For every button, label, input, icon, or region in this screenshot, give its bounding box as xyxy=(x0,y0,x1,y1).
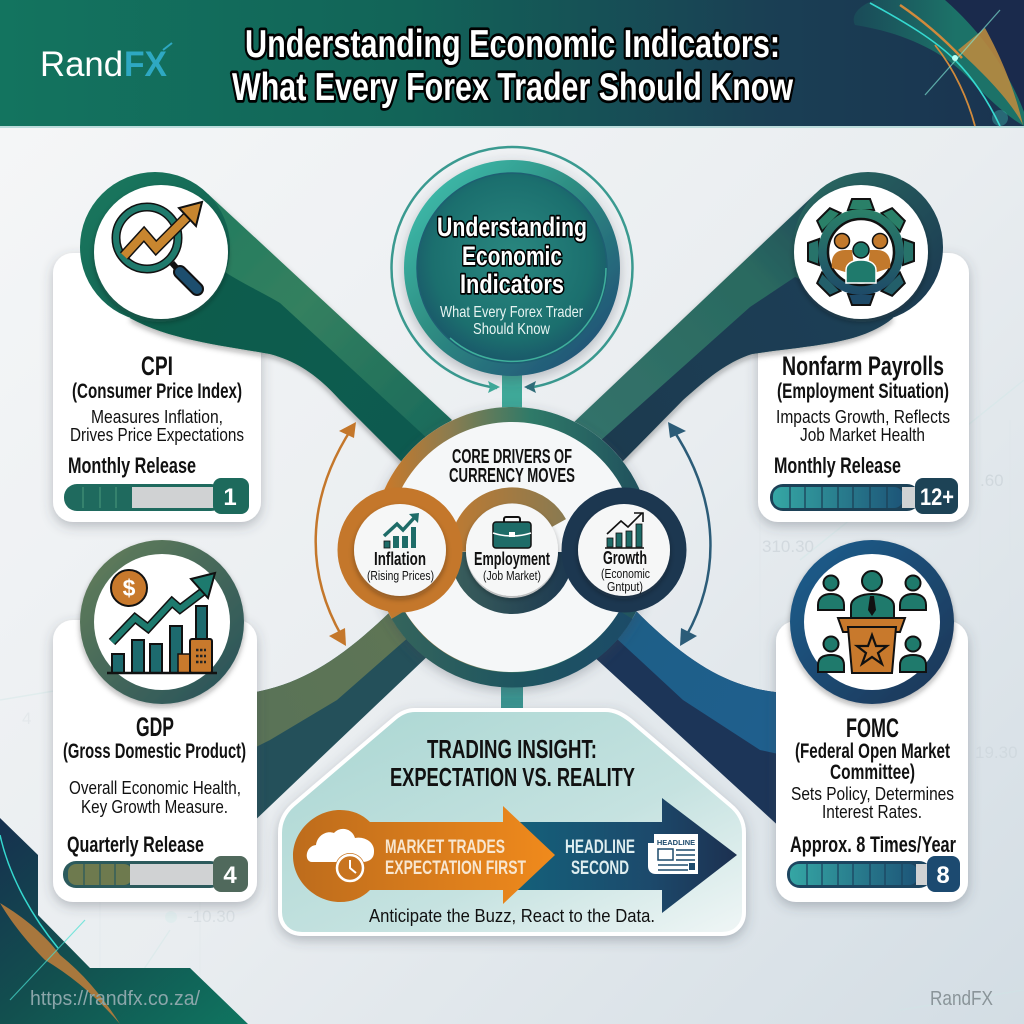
card: FOMC panel xyxy=(776,621,968,902)
connector top xyxy=(502,372,522,417)
FOMC icon disc xyxy=(790,540,954,704)
driver: Inflation: (Rising Prices) xyxy=(367,568,434,583)
footer brand: RandFX xyxy=(930,988,993,1010)
circle subheading: Should Know xyxy=(473,321,550,338)
band: GDP to centre xyxy=(250,612,432,825)
header banner xyxy=(0,0,1024,128)
icon: growth chart with coin xyxy=(107,570,217,673)
logo: FX xyxy=(124,45,168,84)
CPI card text: Drives Price Expectations xyxy=(70,425,244,445)
CPI card text: Measures Inflation, xyxy=(91,407,223,427)
CPI icon disc xyxy=(80,172,230,322)
driver: Inflation xyxy=(346,496,454,604)
Nonfarm card text: Impacts Growth, Reflects xyxy=(776,407,950,427)
insight heading: TRADING INSIGHT: xyxy=(427,734,597,764)
circle subheading: What Every Forex Trader xyxy=(440,304,584,321)
driver: Employment xyxy=(458,495,566,606)
card: GDP panel xyxy=(53,620,257,902)
CPI card text: CPI xyxy=(141,351,173,381)
GDP card text: Quarterly Release xyxy=(67,832,204,857)
title: What Every Forex Trader Should Know xyxy=(232,66,794,109)
FOMC card text: FOMC xyxy=(846,713,899,743)
GDP card text: Overall Economic Health, xyxy=(69,778,241,798)
FOMC card text: (Federal Open Market xyxy=(795,740,950,763)
arrow: navy cycle xyxy=(668,422,710,646)
driver: Employment: Employment xyxy=(474,549,550,569)
faint chart background: 310.30 xyxy=(762,537,814,556)
FOMC card text xyxy=(790,713,956,857)
icon: rising bars xyxy=(384,513,419,548)
hub heading: CORE DRIVERS OF xyxy=(452,446,572,468)
driver: Growth: Growth xyxy=(603,548,647,568)
panel: trading insight xyxy=(280,710,744,934)
arrow: headline second: SECOND xyxy=(571,858,629,879)
central title circle xyxy=(392,147,632,388)
Nonfarm release bar xyxy=(770,478,958,514)
driver: Growth xyxy=(570,496,678,604)
CPI release bar: 1 xyxy=(223,484,237,511)
card: CPI panel xyxy=(53,253,261,522)
driver: Growth: Gntput) xyxy=(607,579,643,594)
icon: cloud with clock xyxy=(307,829,374,883)
insight caption: Anticipate the Buzz, React to the Data. xyxy=(369,906,655,926)
FOMC card text: Committee) xyxy=(830,761,915,784)
Nonfarm card text: Job Market Health xyxy=(800,425,925,445)
insight heading xyxy=(390,734,635,792)
logo xyxy=(40,43,172,84)
FOMC release bar: 8 xyxy=(936,862,950,889)
footer url: https://randfx.co.za/ xyxy=(30,988,200,1010)
insight heading: EXPECTATION VS. REALITY xyxy=(390,762,635,792)
header swooshes xyxy=(854,0,1024,126)
arrow: headline second xyxy=(515,798,737,913)
FOMC card text: Sets Policy, Determines xyxy=(791,784,954,804)
Nonfarm card text: (Employment Situation) xyxy=(777,380,949,403)
logo: Rand xyxy=(40,45,123,84)
band: CPI to centre xyxy=(130,194,452,462)
icon: newspaper: HEADLINE xyxy=(657,838,695,847)
Nonfarm card text: Monthly Release xyxy=(774,453,901,478)
circle heading xyxy=(437,212,587,299)
arrow: orange cycle xyxy=(316,422,356,646)
icon: growth chart with coin: $ xyxy=(123,575,136,601)
FOMC card text: Approx. 8 Times/Year xyxy=(790,832,956,857)
GDP card text: GDP xyxy=(136,712,174,742)
icon: gear with people xyxy=(808,199,914,305)
CPI card text xyxy=(68,351,244,478)
faint chart background: .60 xyxy=(980,471,1004,490)
circle heading: Indicators xyxy=(460,269,564,299)
icon: briefcase xyxy=(493,517,531,548)
GDP card text: Key Growth Measure. xyxy=(81,797,228,817)
driver: Employment: (Job Market) xyxy=(483,568,541,583)
Nonfarm icon disc xyxy=(793,172,943,322)
GDP card text xyxy=(63,712,246,857)
FOMC release bar xyxy=(787,856,960,892)
card: Nonfarm Payrolls panel xyxy=(758,253,969,522)
circle heading: Understanding xyxy=(437,212,587,242)
GDP release bar xyxy=(63,856,248,892)
CPI card text: Monthly Release xyxy=(68,453,196,478)
FOMC card text: Interest Rates. xyxy=(822,802,922,822)
arrow: headline second: HEADLINE xyxy=(565,837,635,858)
title xyxy=(232,23,794,109)
arrowheads into connector xyxy=(488,381,536,393)
title: Understanding Economic Indicators: xyxy=(245,23,780,66)
connector bottom xyxy=(501,670,523,712)
bottom-left corner decoration xyxy=(0,818,248,1024)
central hub xyxy=(346,407,678,687)
faint chart background: 4 xyxy=(22,709,31,728)
Nonfarm release bar: 12+ xyxy=(920,484,954,511)
arrow: market trades expectation first: MARKET TRADES xyxy=(385,837,505,858)
Nonfarm card text: Nonfarm Payrolls xyxy=(782,351,944,381)
driver: Inflation: Inflation xyxy=(374,549,426,569)
hub heading xyxy=(449,446,575,487)
icon: growth chart xyxy=(605,513,644,548)
circle heading: Economic xyxy=(462,241,562,271)
hub heading: CURRENCY MOVES xyxy=(449,465,575,487)
driver: Growth: (Economic xyxy=(601,566,650,581)
GDP release bar: 4 xyxy=(223,862,237,889)
Nonfarm card text xyxy=(774,351,950,478)
band: Nonfarm Payrolls to centre xyxy=(572,194,893,462)
circle subheading xyxy=(440,304,584,338)
faint chart background: 19.30 xyxy=(975,743,1018,762)
icon: newspaper xyxy=(648,834,698,874)
arrow: market trades expectation first xyxy=(293,806,555,904)
icon: magnifier with arrow xyxy=(116,202,202,289)
faint chart background: -10.30 xyxy=(187,907,235,926)
faint chart background xyxy=(0,380,1024,1020)
arrow: market trades expectation first: EXPECTATION FIRST xyxy=(385,858,526,879)
icon: speaker at podium xyxy=(818,571,926,673)
GDP card text: (Gross Domestic Product) xyxy=(63,740,246,763)
GDP icon disc xyxy=(80,540,244,704)
band: FOMC to centre xyxy=(592,610,783,830)
CPI card text: (Consumer Price Index) xyxy=(72,380,242,403)
CPI release bar xyxy=(64,478,249,514)
